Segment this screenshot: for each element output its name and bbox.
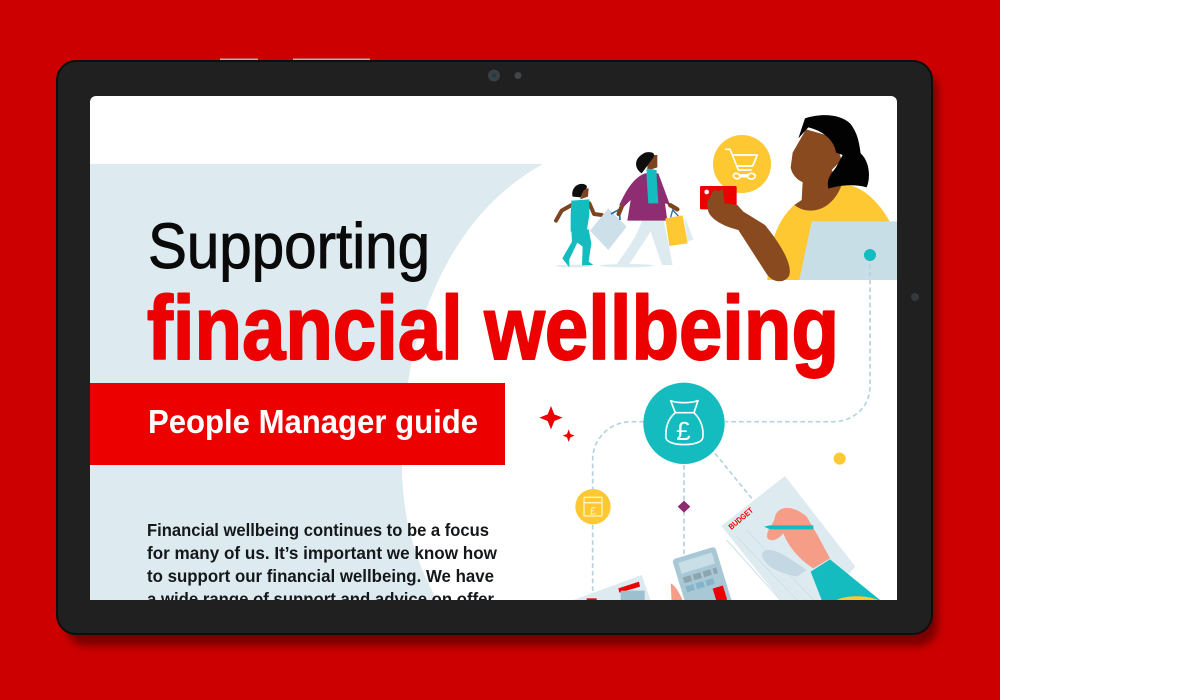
yellow sleeve edge bbox=[837, 596, 878, 600]
teal pen bbox=[764, 525, 813, 529]
top illustration bbox=[556, 115, 898, 281]
seated woman: shirt bbox=[767, 184, 897, 280]
seated woman: hair bbox=[798, 115, 869, 189]
tablet body bbox=[57, 61, 932, 634]
calculator bbox=[672, 547, 732, 600]
heading: Supporting: Supporting bbox=[148, 210, 430, 282]
pale blue curved panel bbox=[90, 164, 543, 600]
seated woman: hand and arm bbox=[707, 189, 790, 281]
seated woman: face and neck bbox=[791, 129, 842, 211]
lower illustration bbox=[539, 249, 880, 620]
intro paragraph: for many of us. It’s important we know how bbox=[147, 543, 497, 563]
tablet device bbox=[57, 58, 938, 646]
sparkle stars bbox=[539, 406, 575, 442]
intro paragraph bbox=[147, 523, 497, 600]
child shopper bbox=[556, 184, 602, 267]
heading: financial wellbeing: financial wellbeing bbox=[147, 279, 839, 379]
sensor bbox=[514, 72, 522, 79]
calendar icon: £ bbox=[590, 505, 597, 517]
tablet shadow bbox=[66, 70, 938, 646]
camera bbox=[488, 70, 500, 82]
banner: People Manager guide bbox=[90, 383, 505, 465]
laptop bbox=[799, 221, 898, 280]
yellow shopping bag bbox=[665, 210, 693, 246]
writing hand bbox=[767, 508, 830, 568]
woman shopper bbox=[600, 152, 677, 267]
budget sheet: BUDGET bbox=[727, 506, 755, 532]
screen background bbox=[90, 96, 897, 600]
tablet screen bbox=[90, 96, 898, 620]
calendar icon bbox=[575, 489, 611, 524]
teal sleeve bbox=[811, 559, 880, 600]
dashed connector lines bbox=[593, 257, 870, 603]
connector dot bbox=[864, 249, 876, 261]
intro paragraph: Financial wellbeing continues to be a focus bbox=[147, 520, 489, 540]
money bag icon bbox=[643, 383, 725, 464]
yellow dot bbox=[834, 453, 846, 465]
grey shopping bag bbox=[590, 208, 627, 250]
receipt sheet bbox=[574, 575, 650, 600]
tablet buttons bbox=[220, 58, 370, 62]
hand under calculator bbox=[670, 584, 682, 600]
money bag icon: £ bbox=[676, 416, 691, 446]
shopping cart icon bbox=[713, 135, 771, 193]
banner: People Manager guide: People Manager guide bbox=[148, 403, 478, 440]
purple diamond bbox=[678, 501, 690, 513]
credit card bbox=[700, 186, 737, 209]
intro paragraph: a wide range of support and advice on offer bbox=[147, 589, 494, 609]
side sensor bbox=[911, 293, 919, 301]
budget sheet bbox=[721, 476, 855, 603]
intro paragraph: to support our financial wellbeing. We have bbox=[147, 566, 494, 586]
